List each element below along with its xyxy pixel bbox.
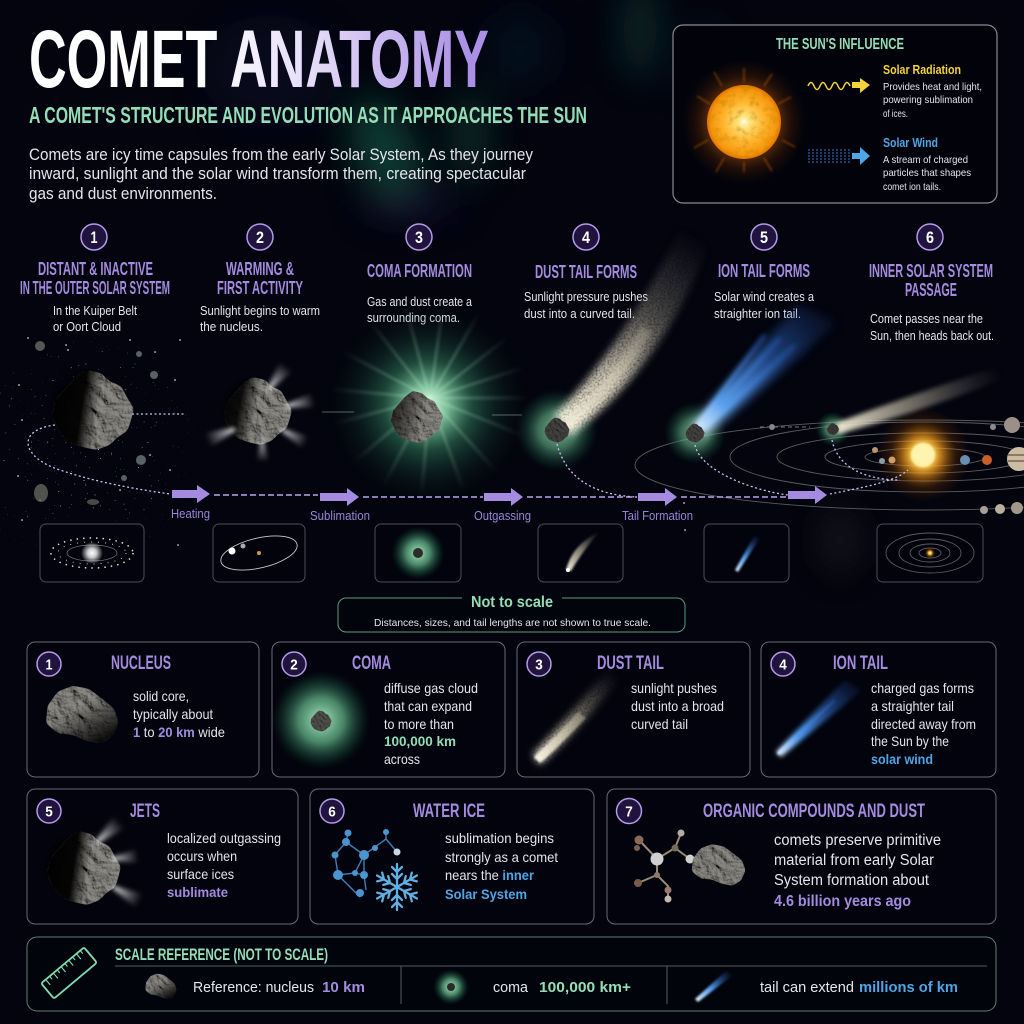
icon: dust tail [533, 672, 618, 764]
description: Sunlight begins to warm [200, 304, 320, 318]
body text: the Sun by the [871, 733, 949, 749]
body text: charged gas forms [871, 680, 974, 696]
body text: solid core, [133, 688, 189, 704]
body text: typically about [133, 706, 213, 722]
body text: sublimate [167, 884, 228, 900]
body text [167, 830, 281, 900]
description [870, 312, 994, 343]
thumbnail 3: coma [375, 524, 461, 582]
coma reference: 100,000 km+ [539, 979, 631, 996]
panel: dust tail [517, 642, 750, 777]
section heading: SCALE REFERENCE (NOT TO SCALE) [115, 945, 328, 964]
green coma with rock nucleus [322, 299, 530, 505]
description: Sun, then heads back out. [870, 329, 994, 343]
number badge 5: 5 [760, 228, 768, 247]
icon: sun [682, 60, 806, 184]
body text: 1 to 20 km wide [133, 724, 225, 740]
solar wind text [883, 154, 971, 193]
badge: 5 [45, 804, 53, 820]
solar wind text: particles that shapes [883, 167, 971, 179]
badge [37, 799, 61, 823]
heading: DUST TAIL FORMS [535, 262, 637, 282]
body text [774, 832, 941, 910]
heading: JETS [130, 801, 160, 822]
body text: to more than [384, 716, 454, 732]
body text: sunlight pushes [631, 680, 717, 696]
body text [133, 688, 225, 740]
icon: dust rock [692, 844, 746, 886]
small debris bodies [34, 341, 158, 505]
step 6: inner solar system passage [815, 224, 1005, 447]
arrow: heating [172, 485, 210, 503]
badge: 7 [625, 804, 633, 820]
process labels: Tail Formation [622, 509, 693, 523]
solar system illustration [635, 407, 1024, 514]
icon: water molecules [332, 829, 400, 897]
solar wind label: Solar Wind [883, 136, 938, 150]
heading: ION TAIL [833, 653, 888, 674]
body text: surface ices [167, 866, 234, 882]
callout: not to scale: Distances, sizes, and tail lengths are not shown to true scale. [374, 617, 651, 629]
badge [527, 652, 551, 676]
description: or Oort Cloud [53, 320, 121, 334]
heading: DISTANT & INACTIVE [38, 259, 153, 279]
comet with dust tail [515, 225, 712, 472]
body text: across [384, 751, 420, 767]
panel heading: THE SUN'S INFLUENCE [776, 36, 904, 53]
description: Solar wind creates a [714, 290, 814, 304]
heading: WARMING & [226, 259, 294, 279]
badge [771, 652, 795, 676]
callout: not to scale [338, 594, 685, 632]
badge [320, 799, 344, 823]
icon: snowflake [375, 864, 419, 910]
arrow: perihelion [788, 486, 827, 504]
body text: sublimation begins [445, 830, 554, 846]
description [367, 295, 472, 325]
tail reference: millions of km [859, 979, 958, 996]
solar radiation text [883, 81, 982, 120]
number badge 5 [751, 224, 777, 250]
body text: System formation about [774, 872, 930, 889]
heading: COMA [352, 653, 391, 674]
icon: coma [271, 670, 371, 770]
number badge 6 [917, 224, 943, 250]
panel: jets [27, 789, 298, 924]
solar radiation label: Solar Radiation [883, 63, 961, 77]
description: the nucleus. [200, 320, 263, 334]
step 5: ion tail forms [663, 224, 838, 465]
number badge 4: 4 [582, 228, 590, 247]
nucleus reference: 10 km [322, 979, 365, 996]
body text: Solar System [445, 886, 527, 902]
panel: coma [271, 642, 505, 777]
icon: solar wind arrow [808, 147, 870, 165]
icon: nucleus [46, 686, 118, 743]
body text: nears the inner [445, 867, 535, 883]
arrow: sublimation [320, 488, 359, 506]
tail reference: tail can extend [760, 979, 854, 996]
panel: nucleus [27, 642, 259, 777]
nucleus reference [145, 974, 365, 999]
heading [217, 259, 303, 298]
icon: organic molecule [634, 830, 694, 902]
panel: the sun's influence [673, 25, 997, 203]
heading: IN THE OUTER SOLAR SYSTEM [20, 278, 170, 298]
intro paragraph: gas and dust environments. [29, 185, 217, 203]
body text: localized outgassing [167, 830, 281, 846]
thumbnail 5: ion tail [704, 524, 789, 582]
description [200, 304, 320, 334]
thumbnail 6: orbits [877, 524, 983, 582]
body text [871, 680, 976, 767]
tail reference [695, 971, 958, 1002]
number badge 1: 1 [90, 228, 98, 247]
thumbnail 4: dust tail [538, 524, 623, 582]
panel: water ice [310, 789, 594, 924]
step 4: dust tail forms [515, 224, 712, 472]
description: dust into a curved tail. [524, 307, 635, 321]
arrow: tail formation [638, 488, 677, 506]
number badge 2 [247, 224, 273, 250]
process labels: Heating [171, 507, 210, 521]
comet near the sun [815, 366, 1005, 447]
description: straighter ion tail. [714, 307, 801, 321]
arrow: outgassing [484, 488, 523, 506]
step 1: distant and inactive [20, 224, 170, 505]
description: Gas and dust create a [367, 295, 472, 309]
description [53, 304, 137, 334]
description: In the Kuiper Belt [53, 304, 137, 318]
heading: WATER ICE [413, 801, 485, 822]
number badge 1 [81, 224, 107, 250]
body text: solar wind [871, 751, 933, 767]
description: surrounding coma. [367, 311, 460, 325]
badge: 1 [46, 656, 52, 674]
panel: scale reference [27, 937, 996, 1011]
body text: directed away from [871, 716, 976, 732]
solar radiation text: of ices. [883, 108, 908, 120]
badge [282, 652, 306, 676]
comet with ion tail [663, 305, 838, 465]
body text [384, 680, 478, 767]
subtitle: A COMET'S STRUCTURE AND EVOLUTION AS IT APPROACHES THE SUN [29, 102, 587, 128]
badge: 2 [290, 656, 298, 674]
panel: organic compounds and dust [607, 789, 996, 924]
badge [616, 798, 642, 824]
body text: comets preserve primitive [774, 832, 941, 849]
heading: ORGANIC COMPOUNDS AND DUST [703, 801, 925, 822]
body text: a straighter tail [871, 698, 954, 714]
title: COMET ANATOMY [29, 14, 489, 105]
body text: occurs when [167, 848, 237, 864]
body text: dust into a broad [631, 698, 724, 714]
intro paragraph: Comets are icy time capsules from the early Solar System, As they journey [29, 146, 534, 164]
body text: 4.6 billion years ago [774, 893, 911, 910]
number badge 3 [406, 224, 432, 250]
thumbnail 2: orbit [213, 524, 305, 582]
solar wind text: A stream of charged [883, 154, 968, 166]
heading: DUST TAIL [597, 653, 664, 674]
process labels [171, 507, 693, 523]
description: Comet passes near the [870, 312, 983, 326]
coma reference [433, 969, 631, 1005]
nucleus reference: Reference: nucleus [193, 979, 314, 996]
number badge 2: 2 [256, 228, 264, 247]
heading [20, 259, 170, 298]
heading: FIRST ACTIVITY [217, 278, 303, 298]
body text: curved tail [631, 716, 688, 732]
panel: ion tail [761, 642, 996, 777]
body text: that can expand [384, 698, 472, 714]
body text: 100,000 km [384, 733, 456, 749]
icon: ion tail [776, 680, 862, 757]
heading: NUCLEUS [111, 653, 171, 674]
process labels: Outgassing [474, 509, 531, 523]
intro paragraph: inward, sunlight and the solar wind transform them, creating spectacular [29, 165, 526, 183]
comet nucleus, dark side left [47, 368, 134, 452]
solar radiation text: Provides heat and light, [883, 81, 982, 93]
heading: COMA FORMATION [367, 261, 472, 281]
heading: ION TAIL FORMS [718, 261, 810, 281]
body text [631, 680, 724, 732]
body text: diffuse gas cloud [384, 680, 478, 696]
coma reference: coma [493, 979, 529, 996]
body text [445, 830, 558, 902]
comet trajectory [28, 414, 908, 506]
heading [869, 261, 993, 300]
icon: radiation arrow [808, 78, 870, 93]
comet with jets [204, 361, 316, 462]
body text: strongly as a comet [445, 849, 558, 865]
number badge 6: 6 [926, 228, 934, 247]
badge: 4 [779, 656, 787, 674]
description [714, 290, 814, 321]
description: Sunlight pressure pushes [524, 290, 648, 304]
step 2: warming and first activity [200, 224, 320, 462]
icon: jets [43, 816, 143, 908]
description [524, 290, 648, 321]
step 3: coma formation [322, 224, 530, 505]
badge: 6 [328, 804, 336, 820]
number badge 4 [573, 224, 599, 250]
intro paragraph [29, 146, 534, 203]
process labels: Sublimation [310, 509, 370, 523]
solar radiation text: powering sublimation [883, 94, 973, 106]
badge: 3 [535, 656, 543, 674]
badge [37, 652, 61, 676]
body text: material from early Solar [774, 852, 934, 869]
number badge 3: 3 [415, 228, 423, 247]
thumbnail 1: kuiper belt [40, 524, 144, 582]
star field [0, 320, 685, 570]
solar wind text: comet ion tails. [883, 181, 941, 193]
callout: not to scale: Not to scale [471, 594, 553, 611]
heading: PASSAGE [905, 280, 957, 300]
icon: ruler [41, 947, 97, 999]
